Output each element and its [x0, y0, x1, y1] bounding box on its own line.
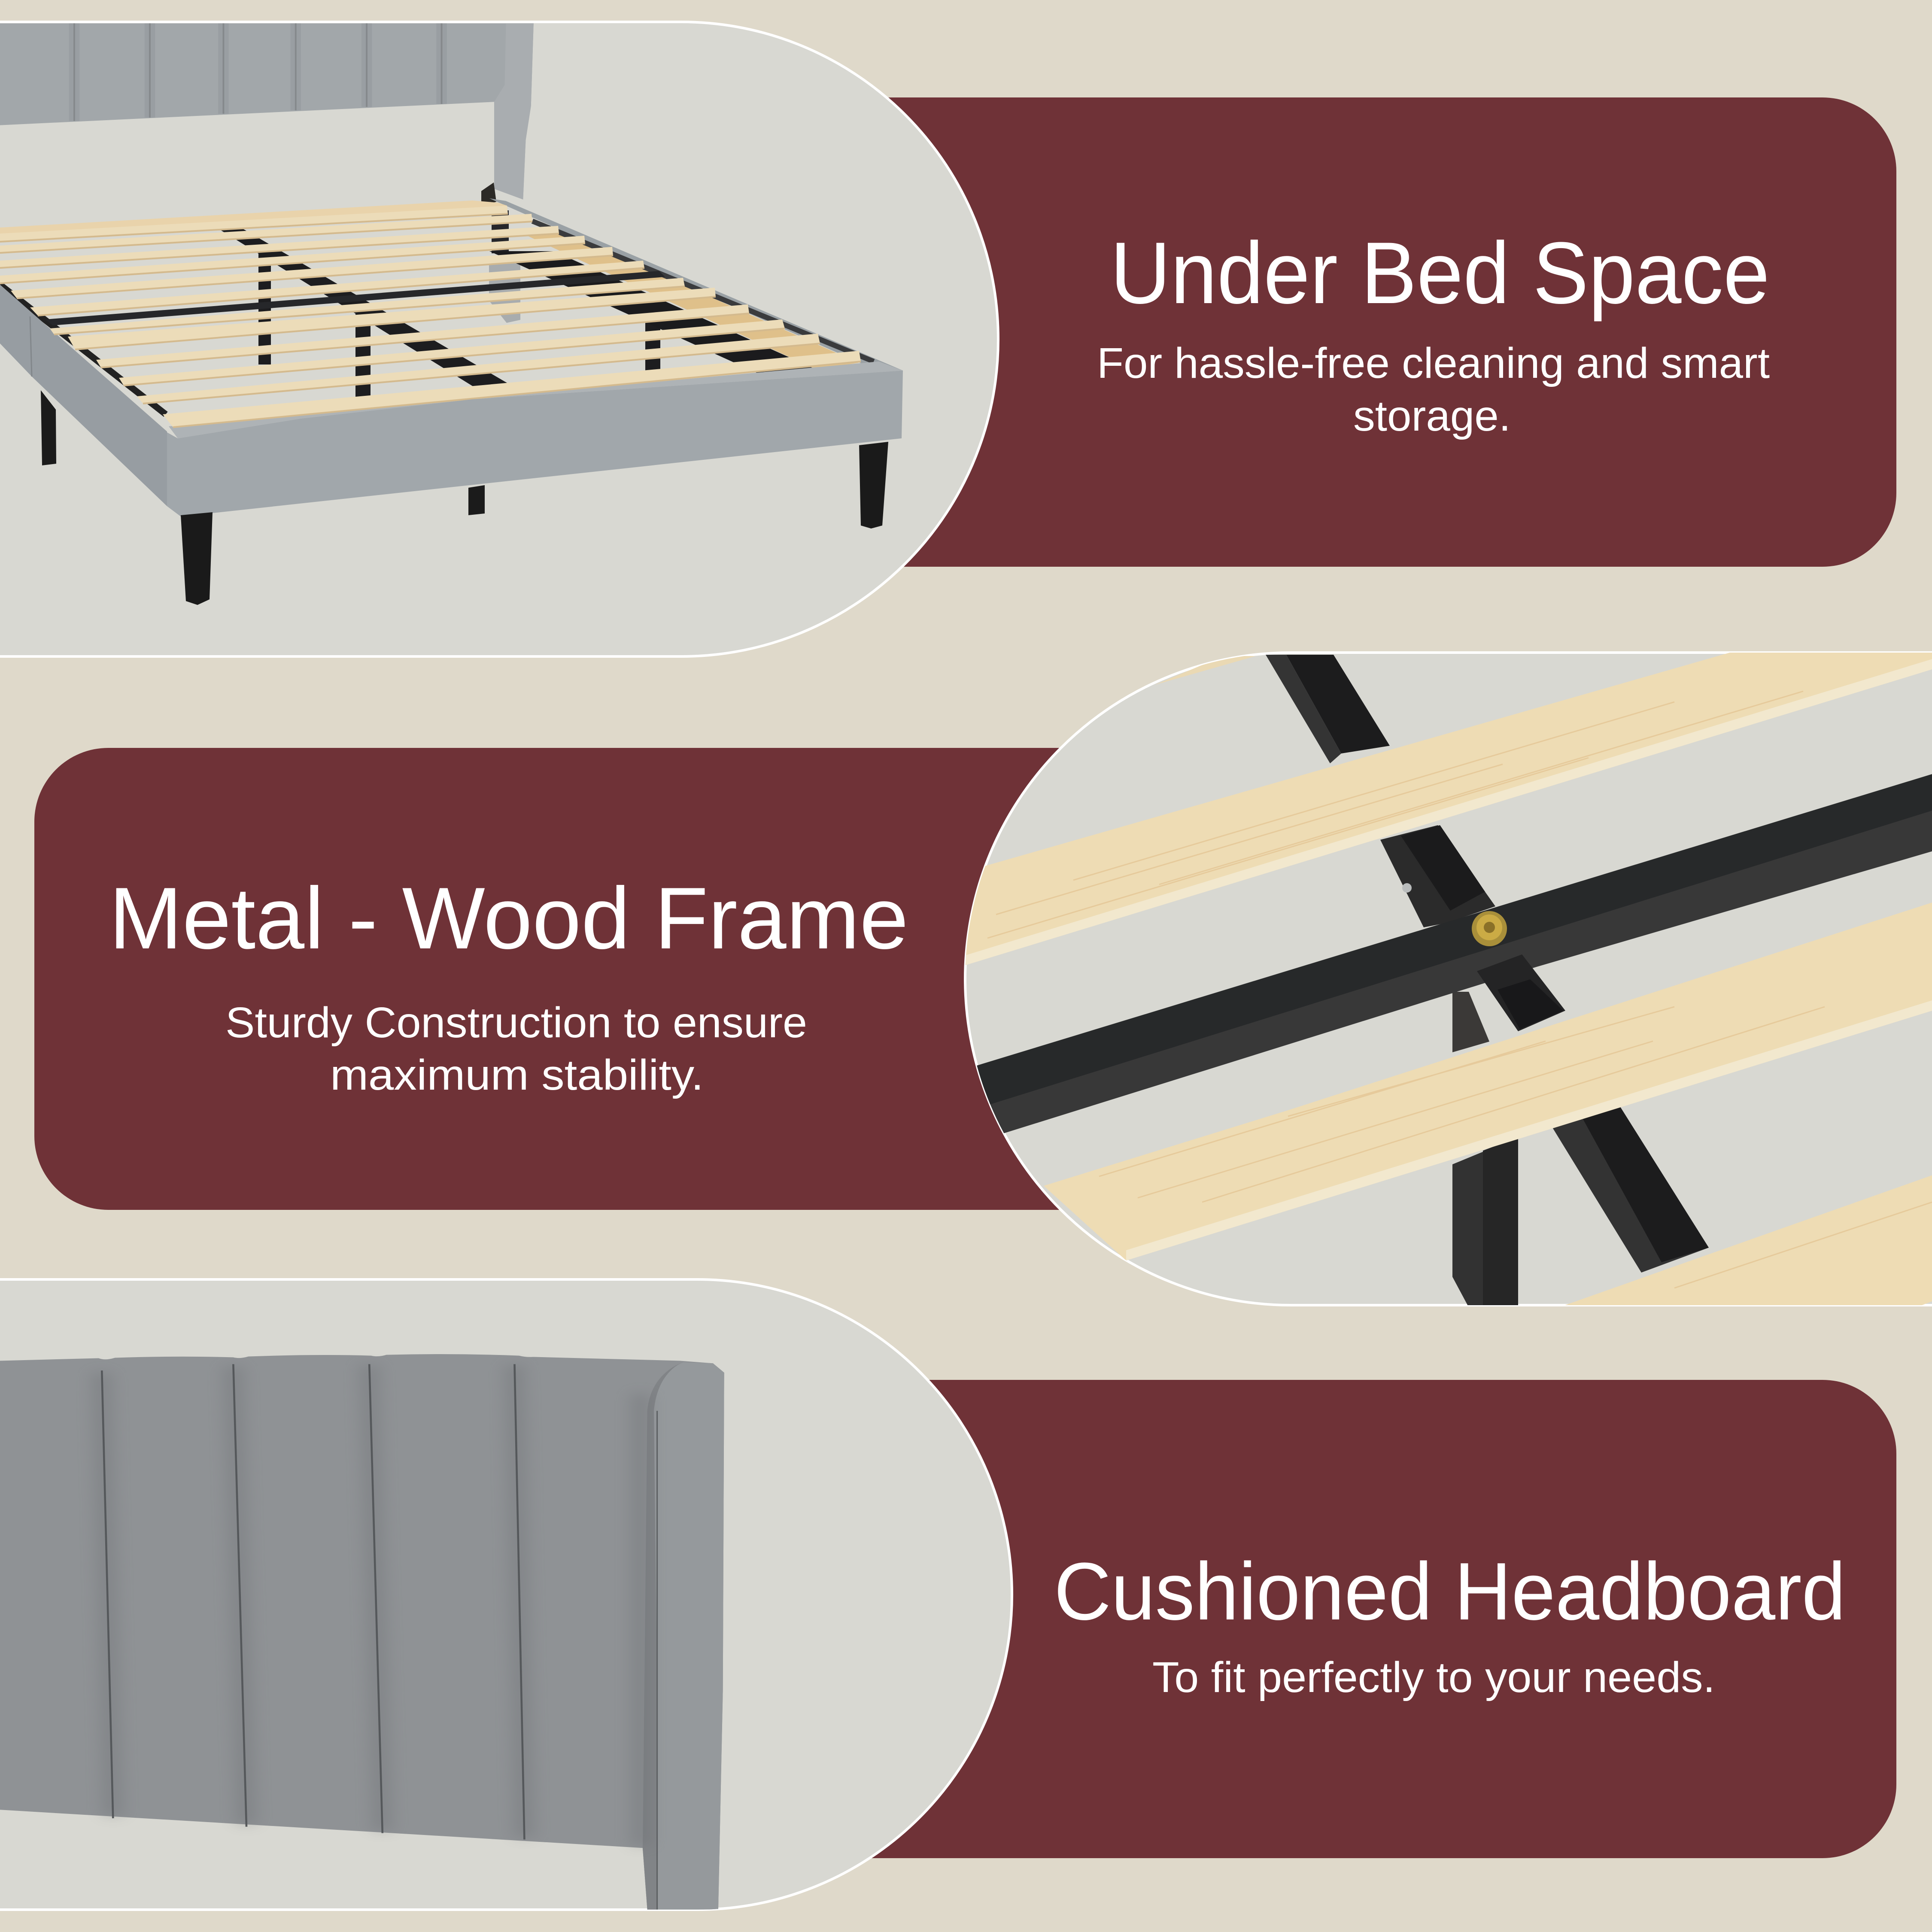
illustration: wood slats and metal bars: [945, 650, 1932, 1307]
photo frame: slat close-up: [965, 653, 1932, 1305]
panel: cushioned headboard: [0, 1279, 1896, 1910]
heading: under bed space: Under Bed Space: [1110, 224, 1770, 322]
heading: metal wood frame: Metal - Wood Frame: [109, 869, 908, 967]
text block: metal wood frame description: [225, 999, 807, 1099]
maroon card: cushioned headboard: [644, 1380, 1896, 1858]
maroon card: metal wood frame: [34, 748, 1236, 1210]
heading: cushioned headboard: Cushioned Headboard: [1054, 1546, 1846, 1637]
panel: under bed space: [0, 22, 1896, 656]
photo frame: bed overview: [0, 22, 998, 656]
panel: metal wood frame: [34, 650, 1932, 1307]
text block: under bed space description: [1097, 339, 1770, 440]
maroon card: under bed space: [644, 97, 1896, 567]
text block: metal wood frame description: Sturdy Construction to ensure: [225, 999, 807, 1047]
illustration: bed frame with slats: [0, 23, 903, 605]
text block: metal wood frame description: maximum stability.: [330, 1051, 704, 1099]
text block: cushioned headboard description: To fit perfectly to your needs.: [1152, 1653, 1715, 1701]
photo frame: headboard close-up: [0, 1279, 1012, 1910]
text block: under bed space description: For hassle-free cleaning and smart: [1097, 339, 1770, 387]
illustration: upholstered headboard: [0, 1354, 724, 1910]
text block: under bed space description: storage.: [1353, 392, 1511, 440]
